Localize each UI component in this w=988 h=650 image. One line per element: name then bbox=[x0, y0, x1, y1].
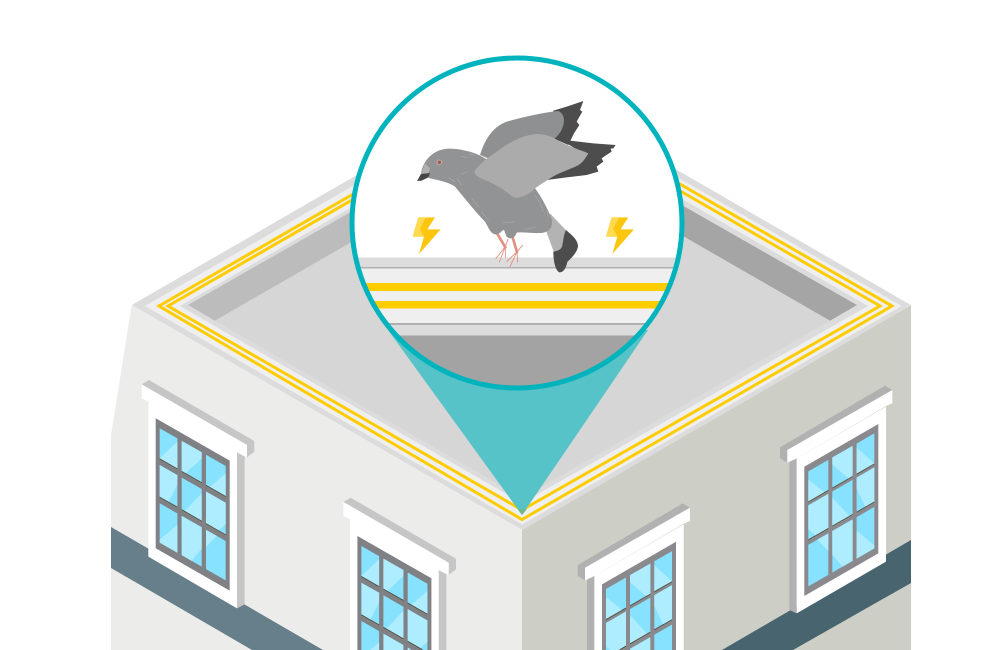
pigeon body bbox=[421, 149, 552, 238]
window: right wall far bbox=[780, 386, 892, 613]
window: right wall near bbox=[578, 503, 690, 650]
illustration: isometric building with bird deterrent callout bbox=[111, 56, 911, 650]
left wall bbox=[111, 305, 522, 650]
roof floor bbox=[215, 144, 830, 498]
pigeon head details bbox=[421, 163, 430, 174]
icon: lightning bolt right bbox=[606, 217, 634, 254]
window: left wall second bbox=[343, 498, 456, 650]
callout pointer bbox=[388, 330, 648, 515]
pigeon back wing bbox=[553, 101, 583, 145]
pigeon front wing bbox=[474, 134, 588, 198]
pigeon tail bbox=[547, 213, 567, 255]
window: left wall first bbox=[142, 380, 254, 608]
pigeon feather marks bbox=[449, 154, 548, 229]
magnified roof edge with track bbox=[358, 258, 676, 386]
roof parapet right inner wall bbox=[522, 114, 857, 321]
callout circle bbox=[340, 58, 700, 396]
roof bbox=[132, 80, 911, 530]
right wall bbox=[522, 305, 911, 650]
right wall band bbox=[722, 540, 911, 650]
callout ring bbox=[352, 58, 682, 388]
roof parapet left inner wall bbox=[188, 114, 522, 321]
roof track: inner yellow wire bbox=[168, 101, 880, 510]
roof track: outer yellow wire bbox=[159, 95, 892, 520]
left wall band bbox=[111, 527, 323, 650]
pigeon front wing tips bbox=[542, 137, 616, 181]
pigeon bbox=[417, 101, 616, 272]
icon: lightning bolt left bbox=[413, 217, 441, 254]
pigeon legs bbox=[496, 234, 523, 267]
